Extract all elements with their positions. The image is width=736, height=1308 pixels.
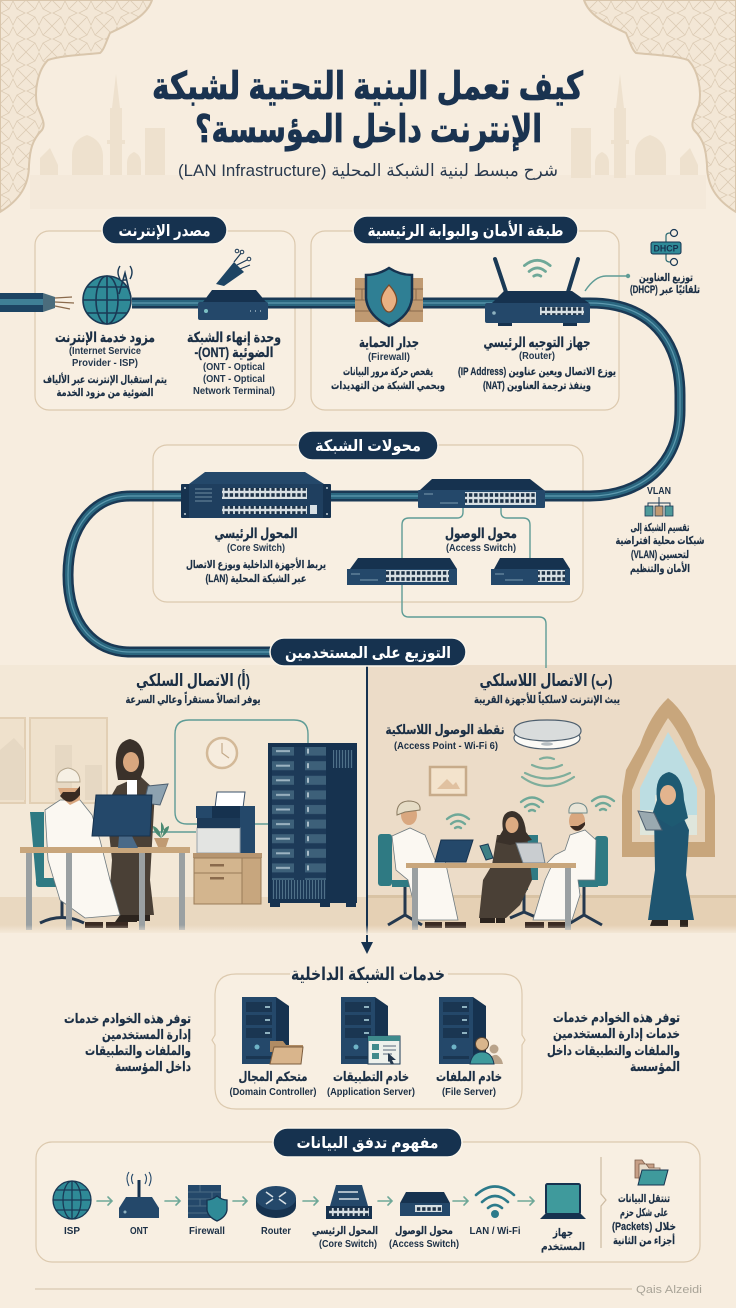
callout: VLAN: الأمان والتنظيم [630, 561, 690, 575]
callout: DHCP [630, 230, 700, 296]
text: firewall: (Firewall) [368, 351, 410, 363]
figure: standing woman (wireless) [638, 772, 694, 927]
flow labels: Firewall [189, 1225, 225, 1237]
text: router: (Router) [519, 350, 555, 362]
icon: fiber strand [216, 249, 251, 286]
text: left services note: والملفات والتطبيقات [85, 1043, 191, 1058]
pill: internet source [102, 216, 227, 244]
figure: standing woman (wired) [106, 739, 168, 922]
icon: ceiling access point [514, 720, 581, 749]
icon: folders [635, 1160, 668, 1185]
flow labels: LAN / Wi-Fi [470, 1225, 521, 1237]
text: ONT: (ONT - Optical [203, 373, 265, 385]
label: application server: (Application Server) [327, 1086, 415, 1098]
flow labels: Router [261, 1225, 291, 1237]
text: core switch: يربط الأجهزة الداخلية وبوزع الاتصال [186, 557, 326, 571]
text: right services note: خدمات إدارة المستخدمين [553, 1026, 680, 1041]
text: right services note [547, 1010, 680, 1074]
icon: printer [196, 792, 255, 853]
text: access switch: محول الوصول [445, 525, 517, 542]
main cable [68, 303, 680, 652]
text: router [458, 334, 616, 392]
subtitle: شرح مبسط لبنية الشبكة المحلية (LAN Infrastructure) [178, 161, 558, 181]
icon: wifi over right man [592, 796, 614, 810]
icon: small switch 2 [491, 558, 570, 585]
label: domain controller: (Domain Controller) [230, 1086, 316, 1098]
text: access point label: (Access Point - Wi-Fi 6) [394, 740, 498, 752]
text: ONT: Network Terminal) [193, 385, 275, 397]
text: packets note [612, 1193, 676, 1247]
text: ONT [187, 329, 281, 397]
flow labels: (Access Switch) [389, 1239, 459, 1250]
callout: VLAN: (VLAN) لتحسين [631, 549, 689, 561]
title: كيف تعمل البنية التحتية لشبكة [152, 66, 584, 108]
icon: picture frame [430, 767, 466, 795]
callout: VLAN: تقسيم الشبكة إلى [630, 522, 690, 534]
callout: DHCP: تلقائيًا عبر (DHCP) [630, 284, 700, 296]
icon: clock [207, 738, 237, 768]
text: left services note: توفر هذه الخوادم خدمات [64, 1011, 191, 1027]
label: file server: خادم الملفات [436, 1069, 502, 1085]
flow arrows [97, 1197, 534, 1205]
panel: internal services [212, 974, 525, 1109]
label: application server [327, 1069, 415, 1098]
text: core switch: عبر الشبكة المحلية (LAN) [205, 573, 306, 585]
icon: wifi waves from access point [522, 758, 574, 786]
flow icon: access switch [400, 1192, 450, 1216]
text: ONT: الضوئية (ONT)- [194, 344, 274, 361]
icon: file server [439, 997, 503, 1064]
figure: seated man left (wireless) [378, 801, 466, 928]
heading: internal services: خدمات الشبكة الداخلية [291, 964, 445, 984]
icon: silver laptop [516, 843, 560, 866]
title: الإنترنت داخل المؤسسة؟ [195, 109, 542, 151]
icon: small switch 1 [347, 558, 457, 585]
signature: Qais Alzeidi [636, 1284, 702, 1296]
flow labels: محول الوصول [395, 1225, 453, 1237]
figure: seated man (wired) [30, 768, 128, 928]
text: right services note: المؤسسة [630, 1059, 680, 1074]
icon: ONT device [198, 290, 268, 320]
lower scene: wireless background [368, 665, 736, 933]
icon: firewall [355, 268, 423, 326]
icon: access switch [418, 479, 545, 508]
text: core switch: المحول الرئيسي [214, 525, 298, 542]
icon: cabinet [193, 853, 262, 904]
flow icon: firewall [188, 1185, 227, 1221]
text: ISP [43, 329, 167, 399]
flow divider with chevron [601, 1157, 606, 1248]
title [152, 66, 584, 151]
text: ONT: وحدة إنهاء الشبكة [187, 329, 281, 346]
text: firewall: يفحص حركة مرور البيانات [343, 366, 433, 378]
flow labels: المحول الرئيسي [312, 1225, 378, 1237]
flow icon: router [256, 1186, 296, 1218]
icon: application server [341, 997, 400, 1064]
decorative corner: top left [0, 0, 152, 212]
text: right services note: والملفات والتطبيقات داخل [547, 1043, 680, 1058]
flow labels: المستخدم [541, 1241, 585, 1253]
icon: core switch [181, 472, 331, 518]
text: core switch: (Core Switch) [227, 542, 285, 554]
pill: switches [298, 431, 438, 460]
heading: wireless: (ب) الاتصال اللاسلكي [480, 671, 612, 691]
arrow: down to services [361, 665, 373, 954]
panel: security and gateway [311, 231, 619, 410]
heading: wired: (أ) الاتصال السلكي [136, 669, 250, 691]
text: core switch [186, 525, 326, 585]
flow labels: ISP [64, 1225, 80, 1237]
label: file server: (File Server) [442, 1086, 496, 1098]
label: application server: خادم التطبيقات [333, 1069, 409, 1085]
heading: wireless [474, 671, 620, 706]
heading: wired [126, 669, 260, 706]
text: access switch: (Access Switch) [446, 542, 516, 554]
flow labels: (Core Switch) [319, 1239, 377, 1250]
icon: meeting table [406, 863, 576, 930]
connector lines (teal) [150, 276, 628, 832]
pill: distribution [270, 638, 466, 666]
decorative corner: top right [584, 0, 736, 212]
callout: DHCP: توزيع العناوين [639, 272, 693, 284]
scene bottom fade [0, 925, 736, 935]
figure: seated woman (wireless) [479, 811, 538, 923]
panel: data flow [36, 1142, 700, 1262]
text: ISP: الضوئية من مزود الخدمة [56, 387, 154, 399]
text: ISP: مزود خدمة الإنترنت [55, 329, 155, 346]
dhcp connector dot [626, 274, 630, 278]
flow labels [64, 1225, 585, 1253]
text: ONT: (ONT - Optical [203, 361, 265, 373]
icon: navy laptop [424, 840, 473, 866]
pill: switches: محولات الشبكة [315, 438, 421, 455]
callout: DHCP: DHCP [654, 244, 678, 254]
flow icon: wifi [476, 1186, 514, 1218]
pill: data flow [273, 1128, 462, 1157]
callout: VLAN [616, 486, 704, 575]
icon: router [485, 259, 590, 326]
icon: wifi over left man [447, 814, 469, 828]
text: firewall: وبحمي الشبكة من التهديدات [331, 380, 445, 392]
pill: data flow: مفهوم تدفق البيانات [296, 1135, 438, 1152]
text: access switch [445, 525, 517, 554]
panel: network switches [153, 445, 583, 602]
text: packets note: تنتقل البيانات [618, 1193, 670, 1205]
text: left services note: إدارة المستخدمين [102, 1027, 191, 1042]
text: router: يوزع الاتصال ويعين عناوين (IP Address) [458, 366, 616, 378]
pill: security layer [353, 216, 578, 244]
icon: computer monitor [92, 795, 152, 848]
text: access point label: نقطة الوصول اللاسلكية [386, 722, 504, 737]
panel: internet source [35, 231, 295, 410]
pill: security layer: طبقة الأمان والبوابة الرئيسية [368, 221, 564, 240]
skyline left [30, 74, 706, 209]
text: packets note: على شكل حزم [620, 1207, 668, 1219]
text: left services note: داخل المؤسسة [115, 1059, 191, 1074]
icon: fiber cable entry [0, 293, 74, 312]
text: ISP: Provider - ISP) [72, 357, 138, 369]
label: file server [436, 1069, 502, 1098]
icon: domain controller server [242, 997, 303, 1064]
text: left services note [64, 1011, 191, 1074]
callout: VLAN: VLAN [647, 486, 671, 497]
figure: seated man right (wireless) [525, 803, 608, 928]
icon: wifi over woman [521, 798, 543, 811]
text: firewall: جدار الحماية [359, 334, 419, 350]
icon: globe with antenna [83, 266, 132, 324]
skyline right [571, 74, 698, 178]
heading: wired: يوفر اتصالاً مستقراً وعالي السرعة [126, 692, 260, 706]
heading: wireless: يبث الإنترنت لاسلكياً للأجهزة القريبة [474, 692, 620, 706]
window left [0, 718, 107, 803]
pill: internet source: مصدر الإنترنت [118, 223, 210, 240]
icon: server rack [268, 743, 357, 907]
text: router: جهاز التوجيه الرئيسي [484, 334, 590, 351]
flow icon: laptop [540, 1184, 586, 1219]
flow icon: globe [53, 1181, 91, 1219]
text: router: وينفذ ترجمة العناوين (NAT) [483, 380, 591, 392]
label: domain controller [230, 1069, 316, 1098]
text: packets note: (Packets) خلال [612, 1221, 676, 1233]
label: domain controller: متحكم المجال [238, 1069, 308, 1084]
text: right services note: توفر هذه الخوادم خدمات [553, 1010, 680, 1026]
flow icon: ONT [119, 1172, 159, 1218]
text: access point label [386, 722, 504, 752]
icon: desk [20, 847, 190, 930]
text: ISP: يتم استقبال الإنترنت عبر الألياف [43, 372, 167, 386]
callout: VLAN: شبكات محلية افتراضية [616, 535, 704, 547]
icon: arched window [622, 698, 715, 857]
footer rule [35, 1288, 632, 1290]
text: firewall [331, 334, 445, 392]
flow icon: core switch [326, 1185, 372, 1219]
flow labels: جهاز [552, 1227, 573, 1239]
pill: distribution: التوزيع على المستخدمين [285, 645, 451, 662]
flow labels: ONT [130, 1225, 148, 1237]
text: ISP: (Internet Service [69, 345, 141, 357]
lower scene: wired background [0, 717, 366, 932]
icon: potted plant [153, 822, 169, 847]
text: packets note: أجزاء من الثانية [613, 1233, 675, 1247]
